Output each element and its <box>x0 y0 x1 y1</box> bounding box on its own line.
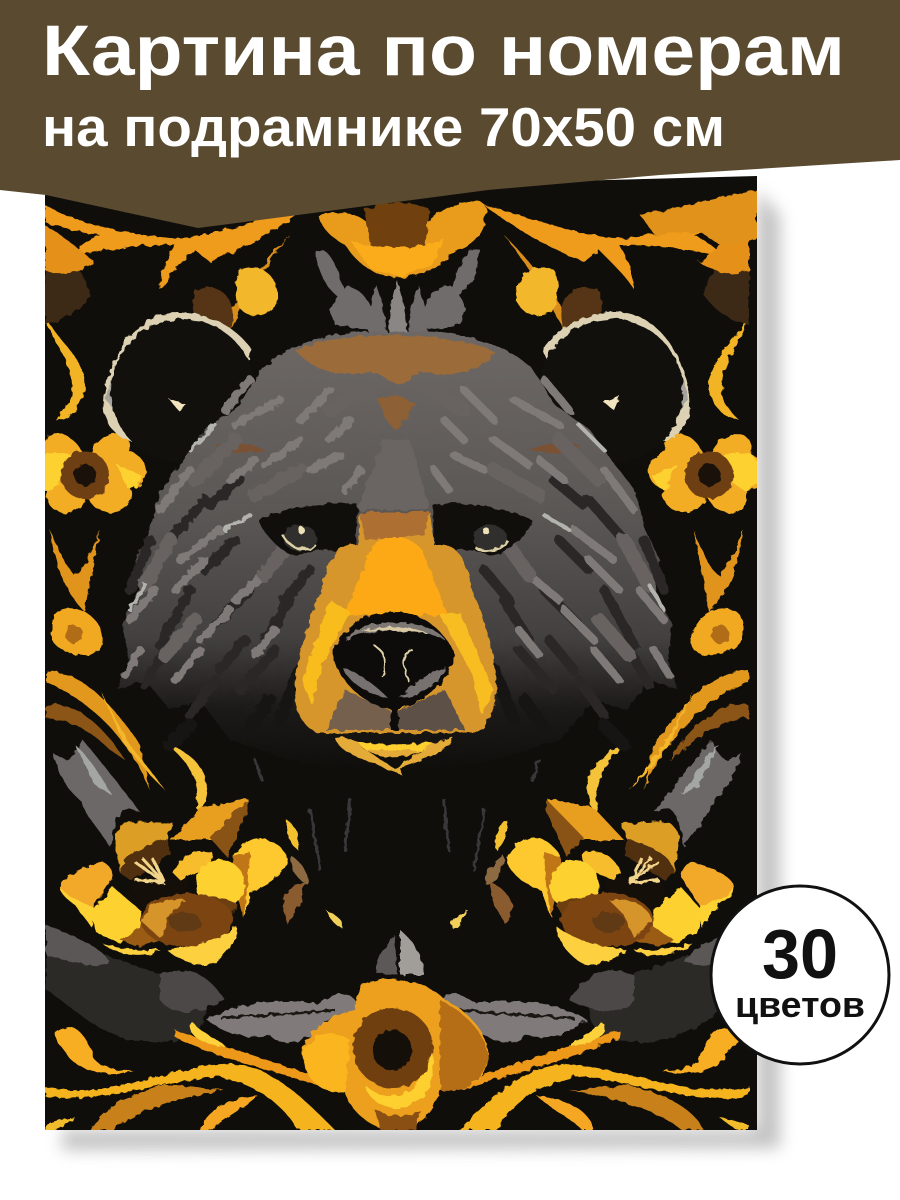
title: Картина по номерам <box>42 12 845 91</box>
nose <box>333 612 455 730</box>
bear head <box>117 330 678 734</box>
bear left ear <box>104 312 255 463</box>
right eye <box>473 525 507 551</box>
fur strokes left <box>125 380 365 870</box>
right ornaments and flowers <box>434 205 766 1130</box>
left eye patch <box>258 503 358 560</box>
snout <box>295 512 497 733</box>
subtitle: на подрамнике 70х50 см <box>42 96 725 158</box>
forehead centre fur <box>358 440 430 510</box>
right eye patch <box>432 503 532 560</box>
badge: 30 colours: 30 <box>762 915 838 993</box>
forehead tan fur <box>295 335 495 385</box>
painting background <box>45 176 757 1130</box>
badge: 30 colours <box>711 886 889 1064</box>
badge: 30 colours: цветов <box>735 984 865 1025</box>
product canvas with painting <box>28 176 780 1150</box>
canvas drop shadow <box>62 190 780 1150</box>
top grey foliage <box>315 249 480 335</box>
right edge ornaments <box>640 190 757 245</box>
left eye <box>283 525 317 551</box>
left ornaments and flowers <box>28 205 360 1130</box>
fur strokes right <box>429 380 669 870</box>
top flower <box>318 201 486 277</box>
mouth <box>335 737 453 775</box>
header banner <box>0 0 900 228</box>
bear right ear <box>543 310 690 442</box>
bottom flower <box>303 930 488 1130</box>
bear painting <box>28 190 766 1130</box>
